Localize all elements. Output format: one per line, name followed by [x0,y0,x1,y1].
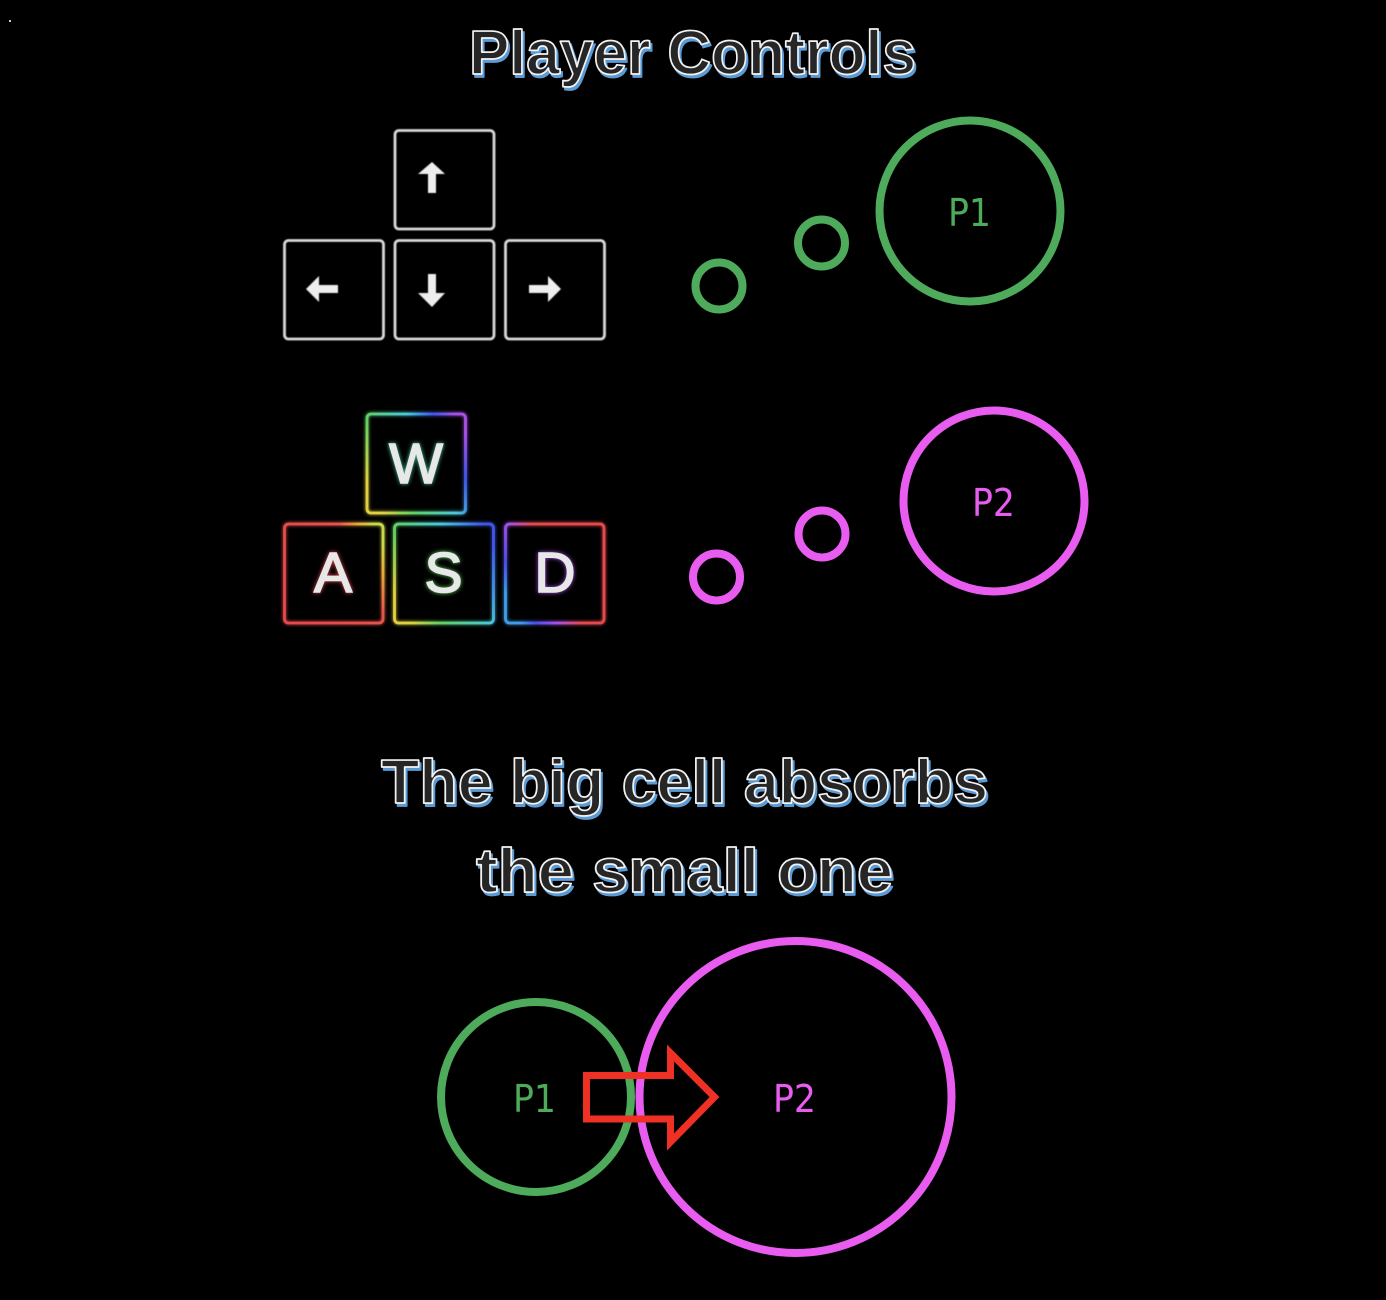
small cell [693,554,740,600]
arrow keys group [284,130,604,339]
key: left [284,240,384,339]
key: S: S [424,541,463,605]
key: A [284,524,383,623]
player 2 cells trail [693,410,1084,600]
cell: P1 small [441,1002,631,1192]
medium cell [798,510,846,558]
key: right [506,240,604,339]
label: P1 bottom: P1 [513,1077,556,1121]
WASD keys group [284,414,604,623]
big cell P2 [904,410,1084,592]
heading: The big cell absorbs the small one: The big cell absorbs [381,748,988,817]
key: S [394,524,494,623]
heading: The big cell absorbs the small one: the small one [476,837,893,906]
key: down [395,240,494,339]
key: D [506,524,604,623]
label: P1: P1 [948,191,991,235]
title: Player Controls: Player Controls [469,19,916,88]
cell: P2 big [640,941,952,1253]
medium cell [798,220,845,266]
player 1 cells trail [696,120,1060,310]
label: P2: P2 [972,481,1015,525]
arrow: P1 to P2 [586,1053,714,1142]
speck [9,20,11,22]
small cell [696,262,742,310]
key: D: D [534,541,576,605]
label: P2 bottom: P2 [773,1077,816,1121]
key: W [367,414,466,513]
key: A: A [314,541,352,605]
key: W: W [389,432,443,496]
heading: The big cell absorbs the small one [381,748,988,906]
big cell P1 [880,120,1060,302]
key: up [395,130,494,229]
